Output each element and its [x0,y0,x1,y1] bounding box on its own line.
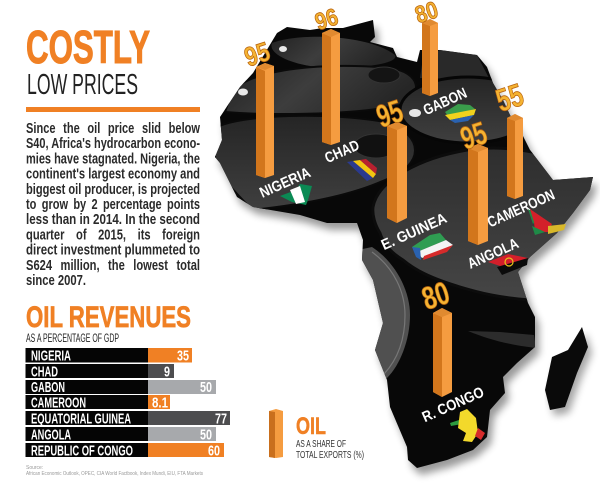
bar chart: oil revenues as a percentage of GDP: 8.1 [152,394,168,412]
bar: E. Guinea 95: 95 [372,93,407,135]
icon: Madagascar [545,327,592,416]
bar: Gabon 80 [412,0,441,96]
icon: flag of Nigeria [280,184,312,205]
bar chart: oil revenues as a percentage of GDP: 77 [215,410,227,428]
bar: R. Congo 80: 80 [417,274,454,317]
country labels: NIGERIA [257,164,313,202]
text block: intro paragraph [26,121,201,289]
icon: flag of Gabon [445,104,476,123]
text block: intro paragraph: less than in 2014. In the second [26,212,200,228]
bar chart: oil revenues as a percentage of GDP [26,348,230,460]
text block: intro paragraph: direct investment plummeted to [26,242,200,258]
text block: intro paragraph: to grow by 2 percentage points [26,197,200,213]
country labels: ANGOLA [465,235,521,273]
text block: intro paragraph: S40, Africa's hydrocarbon econo- [26,136,200,152]
bar chart: oil revenues as a percentage of GDP: 50 [200,379,212,396]
icon: flag of Cameroon [528,209,566,235]
title: LOW PRICES [27,69,138,101]
bar chart: oil revenues as a percentage of GDP: 9 [164,364,170,380]
legend: oil as a share of total exports [269,409,364,461]
bar: Cameroon 55: 55 [491,76,528,119]
source note: African Economic Outlook, OPEC, CIA World Factbook, Index Mundi, EIU, FTA Markets [26,471,203,477]
heading: oil revenues: AS A PERCENTAGE OF GDP [26,333,119,345]
bar: Angola 95: 95 [456,115,491,157]
country labels: CHAD [322,137,362,167]
bar: Chad 96: 96 [312,3,341,36]
bar chart: oil revenues as a percentage of GDP: CHAD [31,364,58,380]
bar chart: oil revenues as a percentage of GDP: GABON [31,379,65,396]
title: COSTLY [26,21,150,73]
text block: intro paragraph: Since the oil price slid below [26,121,201,137]
legend: oil as a share of total exports: OIL [296,413,326,440]
country labels: CAMEROON [485,186,558,231]
bar: E. Guinea 95 [372,93,407,223]
text block: intro paragraph: since 2007. [26,273,86,289]
source note [26,465,203,477]
bar chart: oil revenues as a percentage of GDP: EQUATORIAL GUINEA [31,410,131,428]
icon: flag of Angola [488,254,528,275]
bar chart: oil revenues as a percentage of GDP: REPUBLIC OF CONGO [31,442,133,460]
icon: flag of Chad [347,159,377,181]
bar: Nigeria 95: 95 [241,37,274,73]
country labels: GABON [421,85,470,119]
text block: intro paragraph: mies have stagnated. Nigeria, the [26,152,200,168]
bar: Cameroon 55 [491,76,528,199]
legend: oil as a share of total exports: AS A SHARE OF [296,439,346,450]
text block: intro paragraph: continent's largest economy and [26,166,200,182]
title [26,21,150,101]
text block: intro paragraph: biggest oil producer, is projected [26,182,200,198]
bar chart: oil revenues as a percentage of GDP: 60 [208,442,220,460]
heading: oil revenues: OIL REVENUES [26,301,191,334]
icon: flag of Republic of Congo [450,409,485,442]
country labels: R. CONGO [420,384,487,426]
bar: Nigeria 95 [241,37,274,178]
icon: flag of Equatorial Guinea [412,233,453,260]
bar chart: oil revenues as a percentage of GDP: ANGOLA [31,426,71,444]
bar chart: oil revenues as a percentage of GDP: 50 [200,426,212,444]
bar: R. Congo 80 [417,274,454,397]
bar chart: oil revenues as a percentage of GDP: CAMEROON [31,394,86,412]
bar: Angola 95 [456,115,491,245]
country labels: E. GUINEA [379,210,450,254]
text block: intro paragraph: S624 million, the lowest total [26,258,200,274]
bar chart: oil revenues as a percentage of GDP: NIGERIA [31,348,71,364]
heading: oil revenues [26,301,191,345]
icon: oil rig dots [238,46,421,117]
country labels [257,85,558,426]
text block: intro paragraph: quarter of 2015, its foreign [26,228,200,244]
map of Africa made of oil drums [200,10,600,480]
bar chart: oil revenues as a percentage of GDP: 35 [177,348,189,364]
legend: oil as a share of total exports: TOTAL EXPORTS (%) [296,450,364,461]
source note: Source: [26,465,43,471]
bar: Chad 96 [312,3,341,145]
